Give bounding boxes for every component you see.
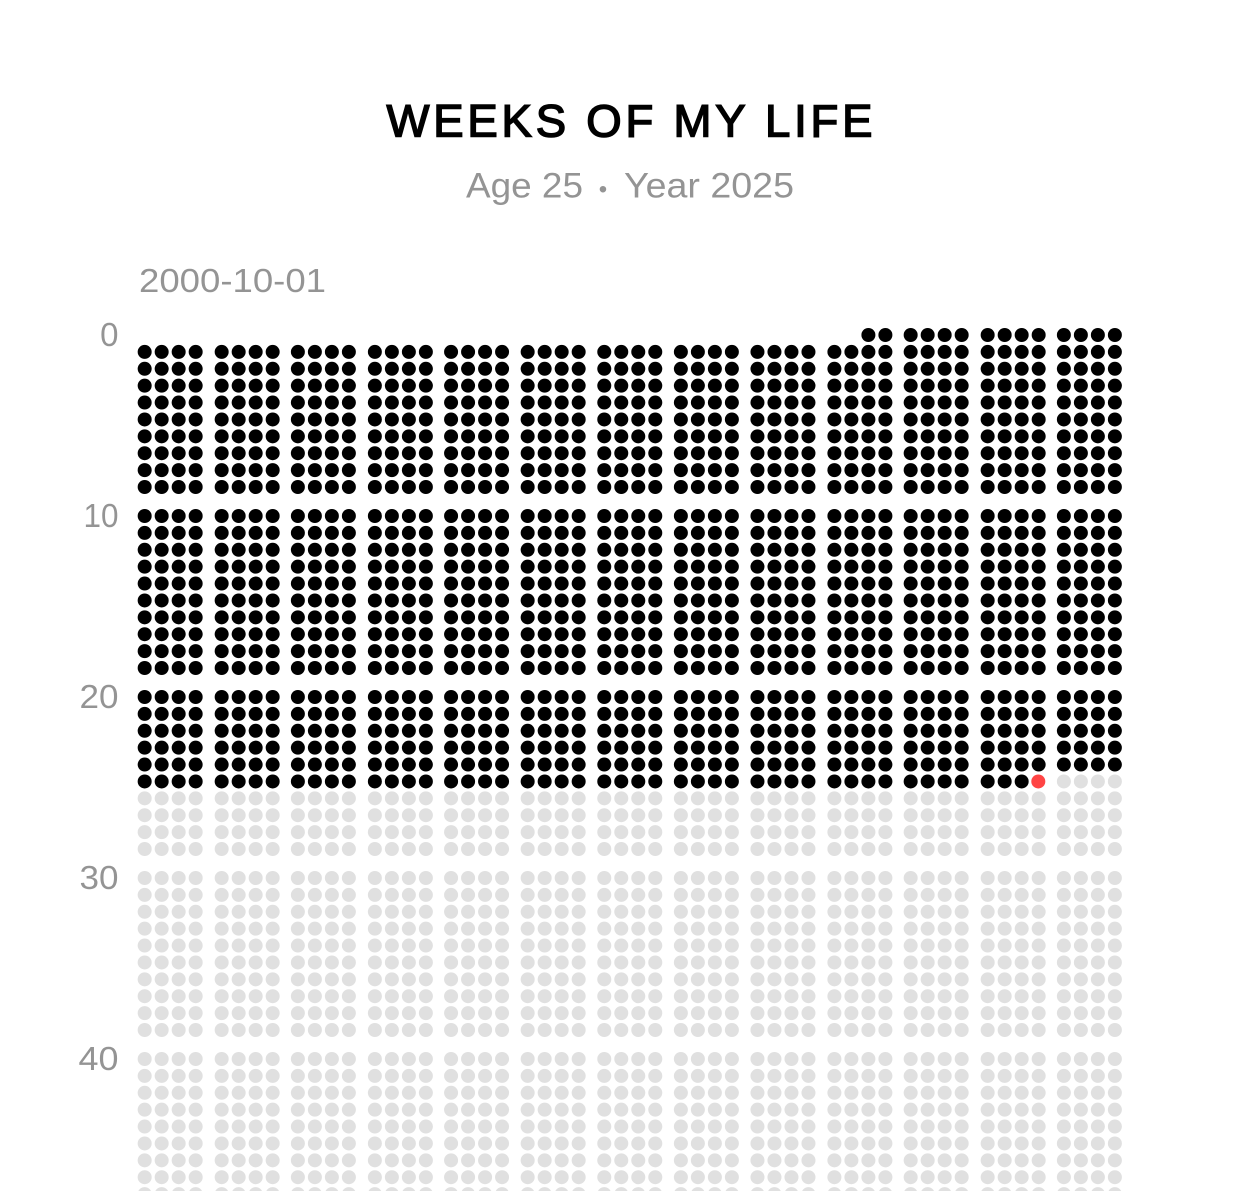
decade 0: ages 0 to 9, lived weeks (138, 328, 1122, 494)
current week marker (1031, 774, 1045, 788)
age axis labels: 40 (78, 1040, 118, 1077)
age axis labels: 20 (80, 678, 118, 715)
decade 4: ages 40 and up, remaining weeks (138, 1052, 1122, 1191)
decade 2: ages 20 to 29, lived and remaining weeks (138, 690, 1122, 856)
birth date label: 2000-10-01 (139, 262, 326, 299)
title: WEEKS OF MY LIFE (386, 96, 872, 146)
age axis labels: 10 (84, 497, 118, 534)
age axis labels: 30 (80, 859, 118, 896)
age axis labels (78, 316, 118, 1077)
week dot grid (138, 328, 1122, 1191)
decade 3: ages 30 to 39, remaining weeks (138, 871, 1122, 1037)
subtitle: Age 25 (466, 166, 583, 206)
subtitle: • (599, 176, 607, 203)
subtitle: Year 2025 (624, 166, 794, 206)
decade 1: ages 10 to 19, lived weeks (138, 509, 1122, 675)
age axis labels: 0 (100, 316, 118, 353)
subtitle (466, 166, 794, 206)
